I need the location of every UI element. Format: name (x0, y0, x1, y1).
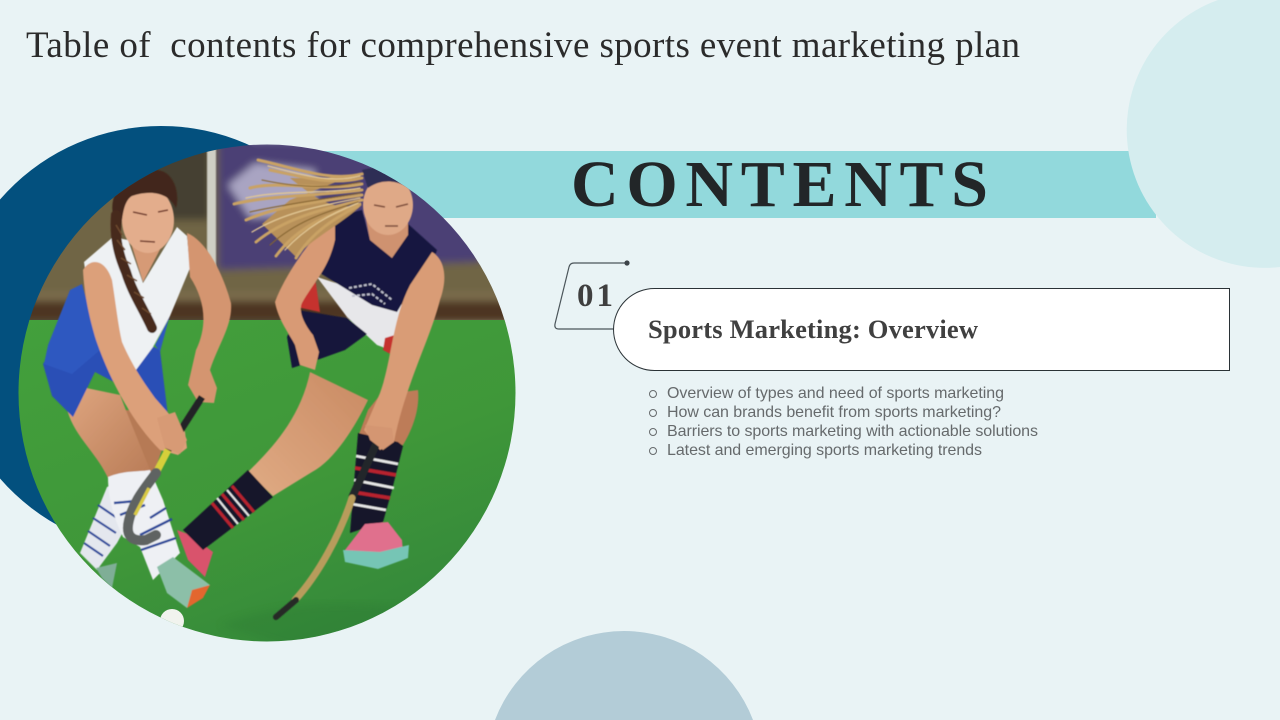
far arm (187, 233, 231, 403)
skirt (287, 310, 367, 368)
hockey stick (352, 442, 377, 498)
circular photo: hockey players (18, 144, 516, 642)
jersey (84, 227, 190, 374)
player two: navy and red kit (177, 160, 444, 617)
number bracket with dot (555, 260, 630, 329)
face detail (133, 210, 168, 242)
blonde hair (234, 160, 362, 258)
front shoe (157, 557, 210, 608)
hockey ball (160, 609, 184, 627)
photo background: fence, banner and turf (18, 144, 516, 642)
back sock (80, 486, 122, 570)
lead sock (183, 470, 273, 550)
player one: blue and white kit (43, 170, 231, 608)
jersey panel red and white (317, 277, 404, 352)
neck and face (132, 246, 160, 282)
hockey stick (168, 397, 202, 450)
decorative circle: bottom (495, 631, 753, 720)
front thigh (67, 387, 144, 478)
hair and braid (112, 170, 178, 230)
shorts (42, 346, 168, 418)
jersey (320, 210, 437, 312)
lead thigh and knee (248, 372, 368, 496)
bullet list: Overview of types and need of sports marketing (667, 385, 1004, 402)
decorative circle: top right (1127, 0, 1280, 268)
bullet list (650, 385, 1038, 459)
near hand (164, 412, 188, 454)
section heading: Sports Marketing: Overview (648, 314, 978, 344)
heading: contents: CONTENTS (571, 148, 988, 221)
left arm (275, 218, 335, 370)
bullet list: Barriers to sports marketing with actionable solutions (667, 423, 1038, 440)
number 01: 01 (577, 278, 613, 314)
bullet list: How can brands benefit from sports marketing? (667, 404, 1001, 421)
far lower leg (358, 390, 418, 445)
front sock (108, 470, 180, 580)
back leg (126, 410, 162, 472)
bullet list: Latest and emerging sports marketing trends (667, 442, 982, 459)
teal contents banner (320, 151, 1156, 218)
back shoe (96, 563, 117, 588)
rear shoe (177, 530, 213, 577)
standing shoe (344, 521, 404, 553)
decorative circle: navy behind photo (0, 126, 374, 552)
standing sock (350, 433, 403, 533)
right arm (364, 252, 444, 450)
near arm (83, 262, 187, 455)
title: Table of contents for comprehensive sports event marketing plan (26, 25, 1020, 66)
neck and face (365, 212, 408, 258)
section pill (614, 288, 1230, 370)
